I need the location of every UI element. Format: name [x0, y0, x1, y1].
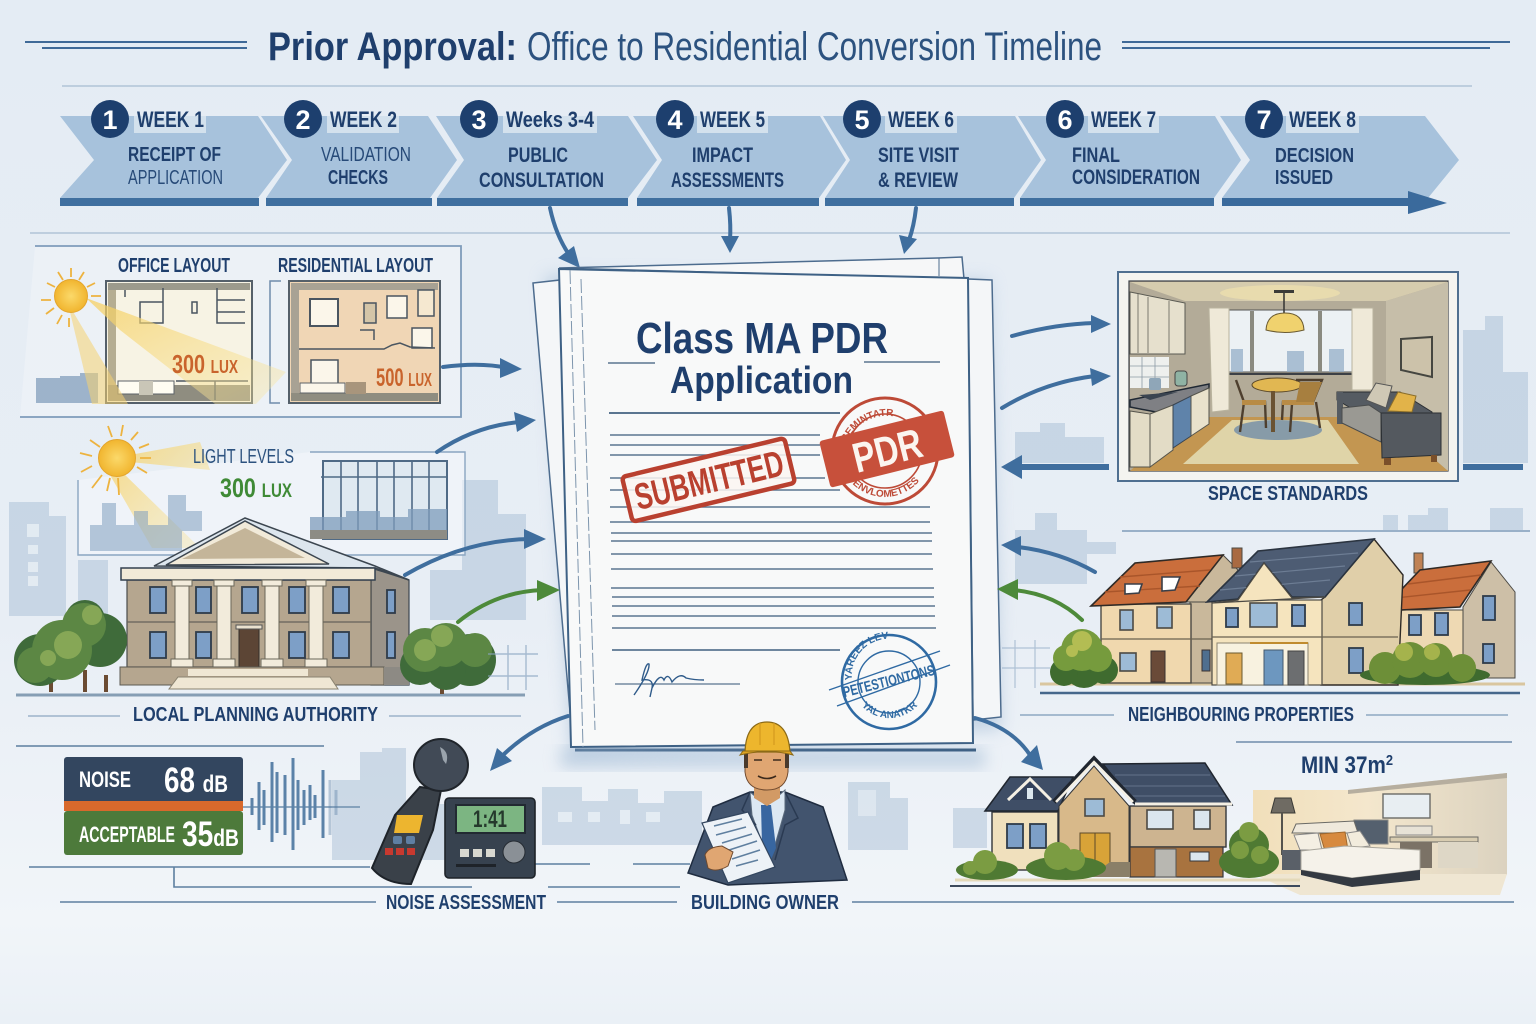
icon: sun: [41, 268, 101, 327]
ceiling: [1130, 282, 1448, 301]
step 6: final consideration: FINAL: [1072, 144, 1120, 167]
shrubs: [1050, 629, 1490, 688]
icon: neighbouring properties houses: [1002, 539, 1525, 693]
step 4: impact assessments: 4: [667, 105, 683, 135]
body text lines: [608, 362, 940, 684]
left wing: [992, 812, 1058, 870]
stamp: PDR: PDR: [848, 419, 927, 482]
step 3: public consultation: CONSULTATION: [479, 169, 604, 192]
label: min 37 m2: MIN 37m: [1301, 752, 1400, 779]
labels: noise assessment and building owner: [60, 892, 1514, 914]
glazed window: [310, 461, 447, 539]
step 1: receipt of application: RECEIPT OF: [128, 144, 221, 166]
step 6: final consideration: CONSIDERATION: [1072, 166, 1200, 189]
office floor plan: [106, 281, 252, 403]
step 2: validation checks: VALIDATION: [321, 144, 411, 166]
label: noise: NOISE: [79, 767, 131, 792]
icon: noise monitor display: [445, 798, 535, 878]
icon: noise monitor display: 1:41: [473, 806, 507, 833]
house left: [1091, 548, 1242, 683]
step 3: public consultation: PUBLIC: [508, 144, 568, 167]
timeline: eight week process chevrons: [60, 100, 1459, 214]
chart: sound waveform: [243, 758, 360, 850]
house right: [1381, 553, 1515, 678]
title: Office to Residential Conversion Timeline: [527, 25, 1102, 69]
bed: [1292, 821, 1358, 833]
step 6: final consideration: WEEK 7: [1091, 107, 1156, 132]
light rays: [110, 442, 210, 548]
pendant lamp: [1266, 290, 1304, 332]
step 7: decision issued: WEEK 8: [1289, 107, 1356, 132]
stamp: blue seal: PETESTIONTONS: [841, 662, 937, 701]
value: 500 lux: 500 LUX: [376, 364, 432, 392]
tree: [1219, 827, 1279, 878]
step 4: impact assessments: IMPACT: [692, 144, 753, 167]
step 2: validation checks: [261, 100, 457, 206]
step 1: receipt of application: 1: [102, 105, 118, 135]
neck and head: [754, 782, 780, 806]
step 5: site visit and review: 5: [854, 105, 870, 135]
step 4: impact assessments: [633, 100, 846, 206]
kitchen cabinets and counter: [1130, 292, 1209, 467]
background skyline silhouettes: [9, 316, 1530, 860]
title: [25, 25, 1510, 69]
house centre: [1207, 539, 1403, 685]
value: 300 lux: 300 LUX: [220, 473, 292, 503]
labels: noise assessment and building owner: NOISE ASSESSMENT: [386, 892, 546, 914]
step 5: site visit and review: & REVIEW: [878, 169, 958, 192]
stamp: blue seal: YAL ANATKR: [863, 701, 918, 718]
facade: [127, 580, 371, 667]
panel: space standards room illustration: [1118, 272, 1458, 481]
step 5: site visit and review: WEEK 6: [888, 107, 954, 132]
step 3: public consultation: Weeks 3-4: [506, 107, 595, 132]
panel: light levels: [78, 425, 465, 555]
step 2: validation checks: WEEK 2: [330, 107, 397, 132]
label: neighbouring properties: NEIGHBOURING PROPERTIES: [1128, 704, 1354, 726]
light beam through office: [86, 298, 286, 404]
step 3: public consultation: 3: [471, 105, 487, 135]
main gable: [1059, 766, 1129, 864]
curtains: [1209, 308, 1373, 412]
arrows: right connections: [997, 315, 1523, 620]
arrows: bottom outputs: [490, 716, 1043, 771]
right block: [1130, 806, 1226, 847]
label: min 37 m2: 2: [1386, 752, 1393, 769]
stamp: PDR: ENVLOMETTES: [852, 477, 918, 498]
residential floor plan: [270, 281, 440, 403]
step 1: receipt of application: WEEK 1: [137, 107, 204, 132]
roof and pediment: [154, 518, 409, 580]
front sheet: [559, 269, 973, 747]
right wall: [1386, 282, 1448, 471]
label: acceptable: ACCEPTABLE: [79, 822, 175, 847]
document subheading: Application: [670, 360, 853, 402]
skyline under sun: [90, 495, 202, 551]
side wall: [371, 568, 409, 685]
step 5: site visit and review: [823, 100, 1041, 206]
icon: handheld sound level meter: [372, 739, 468, 884]
stamp: PDR: PRESEMINTATR: [842, 408, 893, 436]
panel: noise readings: [16, 746, 690, 887]
stamp: blue seal: YAREEZ LEV: [844, 632, 888, 680]
value: 68 dB: 68 dB: [164, 761, 228, 800]
signature: [634, 664, 704, 697]
step 7: decision issued: [1220, 100, 1459, 214]
icon: building owner figure: [688, 722, 847, 885]
tree left: [14, 600, 127, 692]
suit: [688, 792, 847, 885]
application document stack: [532, 256, 1008, 758]
arrows: left inputs: [405, 358, 560, 622]
step 4: impact assessments: ASSESSMENTS: [671, 169, 784, 192]
main roof: [1103, 763, 1232, 805]
labels: noise assessment and building owner: BUILDING OWNER: [691, 892, 839, 914]
columns: [171, 580, 327, 669]
icon: sun: [80, 425, 151, 495]
floor: [1130, 417, 1448, 471]
step 1: receipt of application: [60, 100, 287, 206]
value: 35 dB: 35dB: [182, 815, 239, 854]
stamp: blue seal: [828, 632, 950, 730]
shrubs: [956, 856, 1106, 880]
icon: converted homes: [950, 759, 1300, 886]
hard hat: [745, 722, 790, 752]
label: local planning authority: LOCAL PLANNING AUTHORITY: [133, 704, 379, 726]
arrows from timeline to application: [550, 208, 917, 268]
windows: [150, 587, 349, 658]
step 2: validation checks: 2: [295, 105, 311, 135]
step 7: decision issued: DECISION: [1275, 145, 1354, 167]
shadow: [545, 275, 1002, 755]
skyline beside office plan: [36, 373, 98, 403]
label: space standards: SPACE STANDARDS: [1208, 483, 1368, 505]
rug: [1183, 420, 1359, 464]
step 7: decision issued: 7: [1256, 105, 1272, 135]
value: 300 lux: 300 LUX: [172, 349, 238, 379]
document heading: Class MA PDR: [636, 314, 888, 363]
wall picture: [1401, 337, 1432, 377]
plinth and steps: [120, 667, 384, 685]
panel: minimum studio space: [1236, 742, 1512, 895]
icon: local planning authority building: [14, 518, 538, 695]
window: [1229, 310, 1352, 374]
stamp: submitted: [622, 438, 795, 522]
step 5: site visit and review: SITE VISIT: [878, 144, 959, 167]
step 2: validation checks: CHECKS: [328, 167, 388, 189]
step 1: receipt of application: APPLICATION: [128, 167, 223, 189]
tree right: [400, 623, 496, 694]
step 7: decision issued: ISSUED: [1275, 167, 1333, 189]
stamp: PDR: [820, 396, 954, 506]
step 6: final consideration: 6: [1057, 105, 1073, 135]
label: residential layout: RESIDENTIAL LAYOUT: [278, 255, 433, 277]
panel: office and residential layouts: [20, 246, 461, 417]
step 6: final consideration: [1018, 100, 1241, 206]
label: office layout: OFFICE LAYOUT: [118, 255, 230, 277]
hand: [705, 846, 733, 870]
step 4: impact assessments: WEEK 5: [700, 107, 765, 132]
document held: [702, 812, 775, 883]
label: light levels: LIGHT LEVELS: [193, 446, 294, 468]
step 3: public consultation: [436, 100, 657, 206]
sofa: [1337, 383, 1441, 465]
back sheets: [533, 280, 572, 735]
stamp: submitted: SUBMITTED: [630, 443, 788, 518]
title: Prior Approval:: [268, 25, 517, 69]
table and chairs: [1236, 378, 1322, 432]
